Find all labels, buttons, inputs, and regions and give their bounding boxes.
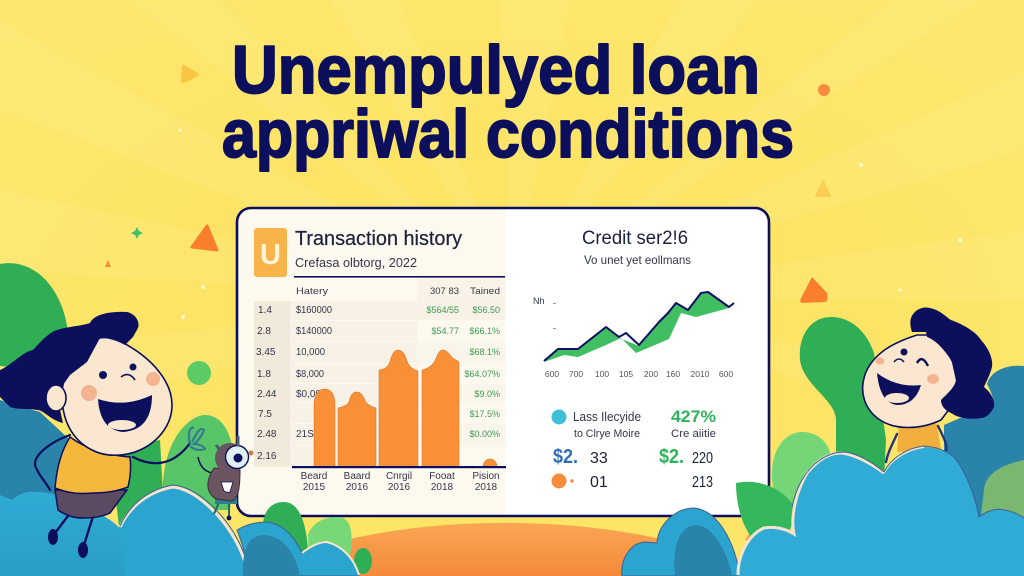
bar chart: 2018 [475, 482, 498, 493]
line chart [533, 292, 734, 379]
mouth [877, 373, 921, 405]
arms [35, 435, 190, 490]
stats: last recycle: Lass Ilecyide [573, 410, 641, 424]
stats: percent [671, 407, 716, 440]
table rows: 2.44 [257, 389, 277, 400]
line chart: Nh [533, 296, 545, 306]
subheading: Crefasa olbtorg, 2022 [295, 255, 417, 270]
stats: amount green: 220 [692, 450, 713, 467]
table header: Tained [470, 286, 500, 297]
table rows: $64.07% [464, 369, 500, 379]
left blue cloud front [120, 485, 250, 576]
nose [894, 359, 904, 362]
stats: last recycle [552, 410, 641, 440]
stats: amount blue [553, 446, 608, 468]
stats: orange row [552, 474, 713, 491]
stats: amount blue: 33 [590, 450, 608, 467]
stats: amount blue: $2. [553, 446, 578, 468]
table rows: 2.16 [257, 451, 277, 462]
table rows [254, 301, 505, 467]
eyes [900, 348, 908, 356]
shorts [55, 490, 127, 518]
title [222, 32, 794, 172]
table rows: $0,00 [296, 389, 321, 400]
table rows: $66.1% [469, 326, 500, 336]
stats: percent: 427% [671, 407, 716, 426]
orange hill [244, 523, 766, 576]
icon: U badge: U [260, 239, 281, 271]
centre-left blue cloud [237, 522, 359, 576]
right blue cloud front [738, 446, 1024, 576]
panel: transaction history [254, 228, 506, 493]
back plants left [0, 263, 234, 535]
table rows: 1.4 [258, 305, 272, 316]
centre-right blue cloud [622, 508, 739, 576]
table rows: 2.48 [257, 429, 277, 440]
left blue cloud back [0, 492, 145, 576]
ear [46, 385, 66, 411]
stats: orange row: 01 [590, 474, 608, 491]
table header: Hatery [296, 286, 328, 297]
eyes [99, 364, 136, 379]
head [62, 337, 172, 455]
table rows: $9.0% [474, 389, 500, 399]
line chart: 200 [644, 369, 658, 379]
nose [121, 375, 135, 380]
table header [294, 276, 505, 301]
front plants bottom [263, 482, 796, 576]
shirt [897, 420, 941, 452]
table rows: $564/55 [426, 305, 459, 315]
table rows: 1.8 [257, 369, 271, 380]
stats: percent: Cre aiitie [671, 428, 716, 440]
heading: credit score: Credit ser2!6 [582, 228, 688, 249]
table rows: $54.77 [431, 326, 459, 336]
hand [189, 428, 205, 450]
bar chart: 2018 [431, 482, 454, 493]
cheeks [81, 372, 160, 401]
bar chart: 2016 [346, 482, 369, 493]
line chart: 105 [619, 369, 633, 379]
line chart: 600 [719, 369, 733, 379]
back plants right [772, 317, 1024, 520]
table header: 307 83 [430, 286, 459, 297]
bar chart [292, 350, 506, 493]
table rows: $140000 [296, 326, 332, 337]
tongue [885, 393, 909, 403]
line chart: 700 [569, 369, 583, 379]
tongue [108, 420, 136, 430]
bar chart: Baard [344, 471, 370, 482]
line chart: 2010 [691, 369, 710, 379]
table rows: $160000 [296, 305, 332, 316]
main card [237, 208, 769, 516]
title: Unempulyed loan [232, 32, 760, 108]
stats: amount green: $2. [659, 446, 684, 468]
bar chart: Cnrgil [386, 471, 412, 482]
cheeks [876, 358, 939, 384]
left character [0, 312, 205, 558]
icon: U badge [254, 228, 287, 277]
decorative shapes [18, 65, 962, 319]
mouth [98, 395, 152, 432]
line chart: 100 [595, 369, 609, 379]
arms [886, 426, 947, 467]
panel: credit score [533, 228, 734, 491]
bar chart: 2016 [388, 482, 411, 493]
small robot character [198, 436, 254, 520]
table rows: $0.00% [469, 429, 500, 439]
bar chart: 2015 [303, 482, 326, 493]
title: appriwal conditions [222, 96, 794, 172]
stats: amount green [659, 446, 713, 468]
right character [863, 307, 994, 467]
heading: transaction history: Transaction history [295, 228, 462, 250]
bar chart: Fooat [429, 471, 455, 482]
table rows: 21S [296, 429, 314, 440]
table rows: 7.5 [258, 409, 272, 420]
table rows: 10,000 [296, 347, 325, 358]
head [863, 335, 960, 428]
table rows: 3.45 [256, 347, 276, 358]
hair [0, 312, 139, 423]
subheading: Vo unet yet eollmans [584, 253, 691, 267]
table rows: $8,000 [296, 369, 324, 380]
table rows: $56.50 [472, 305, 500, 315]
table rows: 2.8 [257, 326, 271, 337]
table rows: $68.1% [469, 347, 500, 357]
bar chart: Beard [301, 471, 327, 482]
shirt [55, 437, 131, 493]
stats: orange row: 213 [692, 474, 713, 491]
line chart: 600 [545, 369, 559, 379]
legs [48, 510, 95, 558]
stats: last recycle: to Clrye Moire [574, 428, 640, 440]
line chart: 160 [666, 369, 680, 379]
table rows: $17.5% [469, 409, 500, 419]
hair [910, 307, 994, 419]
bar chart: Pision [472, 471, 500, 482]
